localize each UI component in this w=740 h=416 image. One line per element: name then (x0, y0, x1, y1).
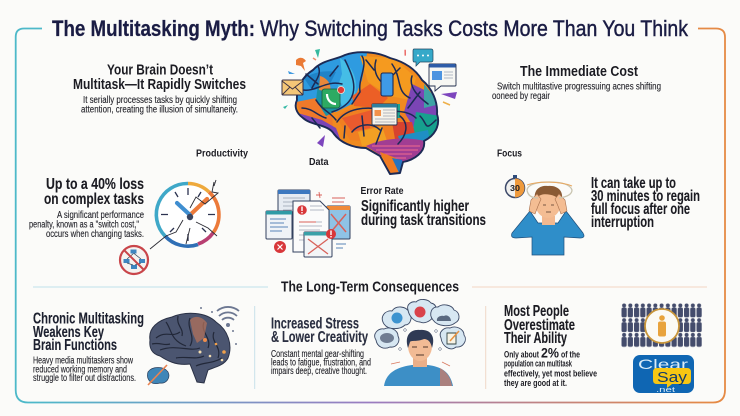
text block: overestimate ability: 2% (541, 346, 559, 361)
text block: brain switches: Multitask—It Rapidly Switches (73, 77, 246, 93)
text block: chronic multitasking: Heavy media multitaskers show (33, 356, 134, 367)
text block: refocus time: full focus after one (591, 201, 690, 218)
text block: error rate: during task transitions (361, 212, 486, 229)
head and hands (536, 190, 560, 218)
text block: stress and creativity: & Lower Creativity (271, 329, 368, 346)
illustration: colourful brain with app icons (282, 48, 457, 178)
logo: ClearSay.net (633, 355, 694, 394)
icon: article window (372, 104, 397, 125)
logo: ClearSay.net: Say (657, 369, 688, 386)
text block: refocus time: interruption (591, 214, 654, 231)
section heading: long-term consequences: The Long-Term Consequences (281, 280, 459, 296)
text block: overestimate ability (504, 303, 597, 389)
text block: 40% loss: Up to a 40% loss (46, 176, 144, 193)
text block: 40% loss: penalty, known as a "switch cost," (29, 220, 139, 231)
icon: phone message (322, 86, 344, 108)
icon: stressed person with thought clouds (375, 299, 465, 386)
dizzy swirl (527, 182, 572, 198)
text block: stress and creativity (271, 316, 371, 377)
icon: dark brain with wifi (148, 307, 239, 385)
icon: no workflow sign (120, 246, 148, 274)
thought clouds (375, 299, 465, 349)
brain (294, 51, 440, 175)
label: Data: Data (309, 156, 329, 168)
text block: error rate: Significantly higher (361, 198, 469, 215)
icon: stressed person with stopwatch: 30 (510, 184, 521, 193)
text block: chronic multitasking: Chronic Multitasking (33, 311, 144, 328)
text block: immediate cost: The Immediate Cost (520, 64, 638, 80)
text block: chronic multitasking: struggle to filter out distractions. (33, 373, 136, 384)
icon: documents with errors (266, 190, 350, 257)
icon: cracked clock (150, 180, 219, 249)
icon: stressed person with stopwatch (506, 175, 584, 255)
title (52, 16, 689, 41)
text block: stress and creativity: Constant mental gear-shifting (271, 349, 364, 360)
shirt and arms (512, 211, 584, 255)
text block: brain switches: Your Brain Doesn’t (107, 62, 213, 78)
icon: chat bubble (413, 49, 433, 66)
text block: refocus time: It can take up to (591, 175, 676, 192)
text block: chronic multitasking: Brain Functions (33, 337, 117, 354)
text block: overestimate ability: of the (561, 350, 580, 361)
text block: brain switches (73, 62, 246, 116)
text block: error rate: Error Rate (360, 185, 404, 197)
text block: overestimate ability: Most People (504, 303, 569, 320)
icon: smartphone (381, 73, 393, 96)
text block: overestimate ability: they are good at it. (504, 378, 567, 389)
divider (485, 306, 487, 389)
person (384, 365, 453, 386)
title: Why Switching Tasks Costs More Than You Think (260, 16, 689, 41)
text block: overestimate ability: effectively, yet most believe (504, 369, 597, 380)
text block: 40% loss (29, 176, 144, 240)
label: Productivity: Productivity (196, 148, 248, 160)
text block: brain switches: It serially processes tasks by quickly shifting (83, 95, 237, 106)
text block: overestimate ability: Overestimate (504, 317, 575, 334)
divider (254, 306, 256, 389)
text block: refocus time (591, 175, 700, 231)
text block: chronic multitasking: Weakens Key (33, 324, 104, 341)
text block: 40% loss: occurs when changing tasks. (46, 229, 144, 240)
text block: brain switches: attention, creating the illusion of simultaneity. (81, 104, 238, 116)
icon: envelope (282, 80, 303, 95)
logo: ClearSay.net: Clear (638, 356, 688, 372)
icon: browser window bubble (429, 64, 456, 91)
text block: refocus time: 30 minutes to regain (591, 188, 700, 205)
text block: overestimate ability: Their Ability (504, 330, 567, 347)
text block: stress and creativity: impairs deep, creative thought. (271, 366, 367, 377)
text block: immediate cost: ooneed by regair (492, 91, 551, 102)
stopwatch (506, 178, 524, 198)
text block: stress and creativity: leads to fatigue, frustration, and (271, 358, 371, 368)
text block: 40% loss: on complex tasks (44, 191, 144, 208)
text block: stress and creativity: Increased Stress (271, 316, 359, 333)
text block: immediate cost: Switch multitastive progressuing acnes shifting (497, 82, 661, 92)
label: Focus: Focus (497, 148, 522, 160)
icon: crowd with one highlighted person (621, 304, 702, 348)
text block: error rate (360, 185, 486, 229)
text block: immediate cost (492, 64, 661, 102)
text block: 40% loss: A significant performance (57, 210, 144, 221)
text block: overestimate ability: population can multitask (504, 359, 572, 370)
text block: chronic multitasking (33, 311, 144, 384)
text block: overestimate ability: Only about (504, 350, 540, 361)
text block: chronic multitasking: reduced working memory and (33, 364, 127, 376)
title: The Multitasking Myth: (52, 16, 255, 41)
logo: ClearSay.net: .net (656, 385, 676, 394)
decorative sparks (283, 49, 457, 147)
